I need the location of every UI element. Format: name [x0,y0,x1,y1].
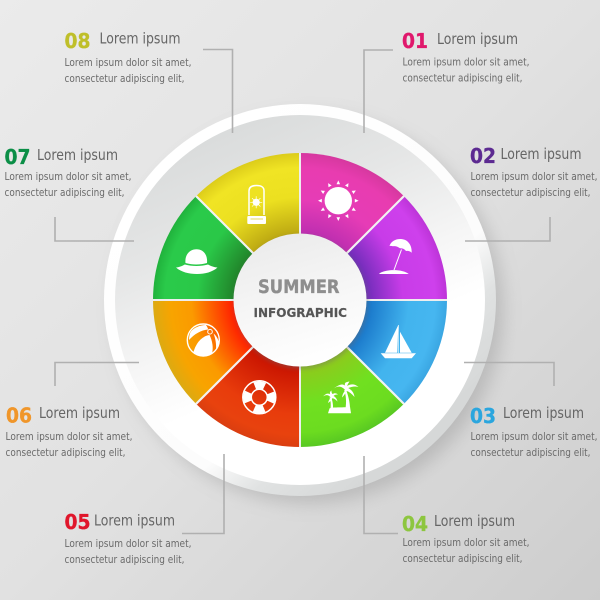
callout 02: Lorem ipsum [500,145,582,163]
icon: beach umbrella [379,239,412,274]
callout 05: 05 [64,510,90,534]
callout 07: 07 [4,145,30,169]
callout 07: Lorem ipsum dolor sit amet, [4,170,132,183]
icon: beach ball [187,324,219,356]
center hub [234,234,368,369]
callout 05 [64,510,192,566]
segment 04 green [300,300,404,447]
callout 06: Lorem ipsum dolor sit amet, [6,430,132,443]
segmented wheel [153,153,447,447]
callout 07: Lorem ipsum [37,146,118,164]
callout 06: 06 [6,404,32,428]
icon: sunscreen bottle [247,186,266,224]
callout 08 [64,29,192,85]
callout 05: Lorem ipsum [94,512,175,530]
icon: life ring [243,381,276,414]
callout 04: 04 [402,512,428,536]
disc drop shadow [115,115,503,503]
callout 08: 08 [64,29,90,53]
callout 05: consectetur adipiscing elit, [64,553,184,566]
inner disc [115,115,485,485]
icon: palm trees on island [323,382,358,413]
callout 08: Lorem ipsum dolor sit amet, [64,56,192,69]
callout 04: consectetur adipiscing elit, [402,552,522,565]
callout 03: Lorem ipsum [503,404,584,422]
segment 03 blue [300,300,447,404]
callout 05: Lorem ipsum dolor sit amet, [64,537,192,550]
callout 01: Lorem ipsum [437,30,518,48]
callout 06: consectetur adipiscing elit, [6,446,126,459]
heading: infographic: INFOGRAPHIC [254,306,347,321]
segment 07 green [153,196,300,300]
callout 01: Lorem ipsum dolor sit amet, [402,56,530,68]
segment 05 red [196,300,300,447]
heading: summer: SUMMER [258,277,340,298]
segment 06 orange [153,300,300,404]
callout 06 [6,404,132,459]
callout 07 [4,145,132,199]
icon: sun hat [176,249,218,274]
callout 01: consectetur adipiscing elit, [402,72,522,84]
outer ring disc [104,104,496,496]
callout 01: 01 [402,29,428,53]
segment 02 purple [300,196,447,300]
callout 08: consectetur adipiscing elit, [64,72,184,85]
icon: sailboat [381,325,416,358]
callout 01 [402,29,530,84]
callout 08: Lorem ipsum [100,30,180,48]
callout 06: Lorem ipsum [39,404,120,422]
callout 02: 02 [470,144,496,168]
callout 03: 03 [470,404,496,428]
callout 04: Lorem ipsum [434,512,515,530]
callout 04 [402,512,530,565]
icon: sun [318,180,359,221]
connector lines [55,50,554,534]
callout 04: Lorem ipsum dolor sit amet, [402,536,530,549]
callout 03 [470,404,598,459]
segment 08 yellow [196,153,300,300]
callout 02 [470,144,598,199]
callout 07: consectetur adipiscing elit, [4,186,124,199]
segment 01 magenta [300,153,404,300]
